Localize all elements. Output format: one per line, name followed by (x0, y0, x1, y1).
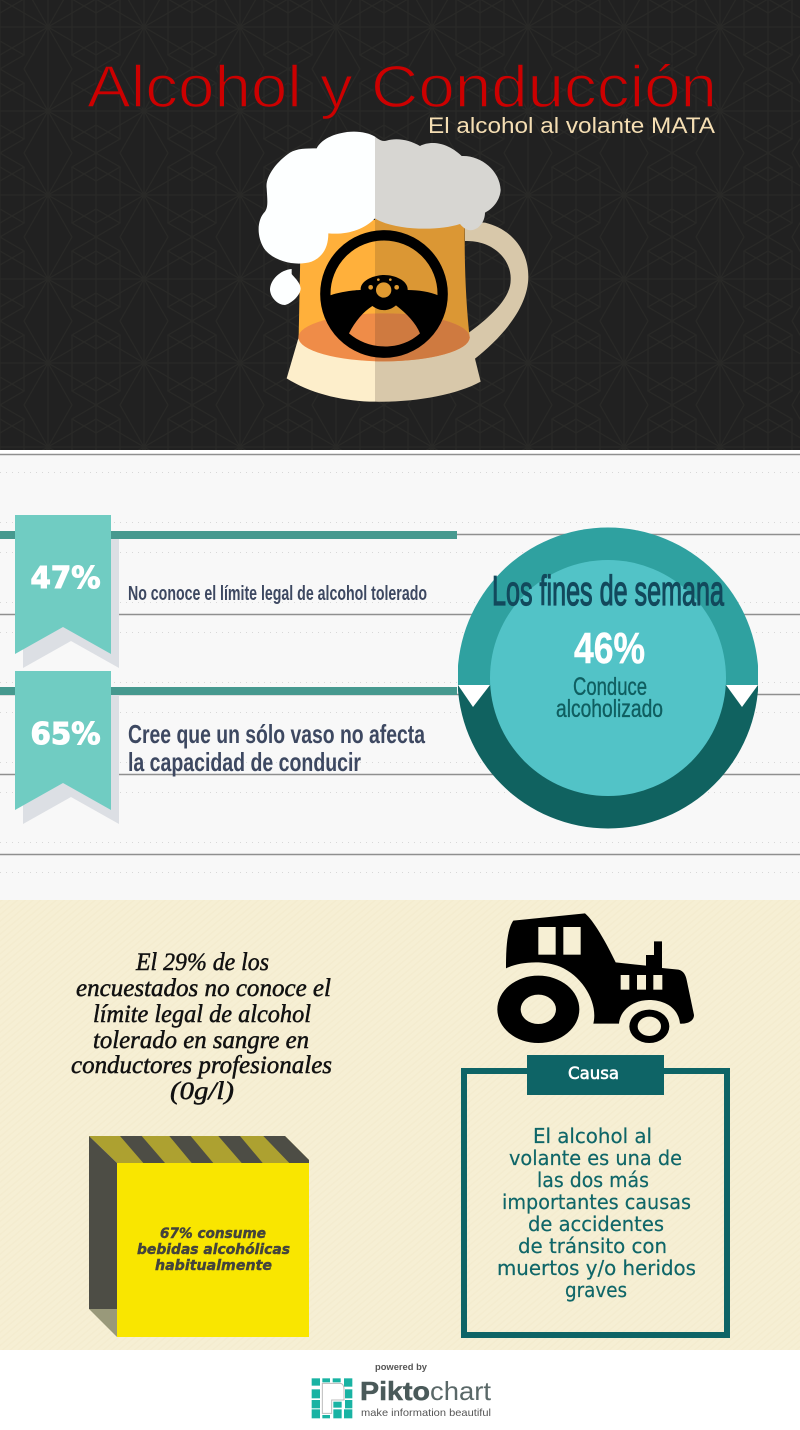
panel body text: de tránsito con (518, 1234, 667, 1258)
foam right (375, 137, 501, 230)
crate text (137, 1226, 290, 1274)
statement 65%: Cree que un sólo vaso no afecta (128, 719, 425, 749)
crate top gold (89, 1136, 309, 1163)
teal bar two (0, 687, 457, 695)
ribbon 47% (15, 515, 119, 668)
ribbon body (15, 671, 111, 810)
statement 65% (128, 719, 425, 777)
script text block (71, 949, 332, 1105)
ruled notebook lines (0, 454, 800, 872)
crate text: 67% consume (160, 1226, 266, 1242)
crate front (117, 1163, 309, 1337)
beer liquid ellipse (298, 313, 470, 361)
ribbon body (15, 515, 111, 654)
ribbon shadow (23, 695, 119, 824)
cream section background (0, 900, 800, 1350)
subtitle: El alcohol al volante MATA (428, 113, 715, 138)
crate underside (89, 1309, 117, 1337)
steering wheel rim (325, 235, 443, 353)
ribbon value: 47% (30, 561, 100, 596)
title: Alcohol y Conducción (87, 54, 717, 120)
script text block: tolerado en sangre en (93, 1027, 309, 1054)
cause panel (464, 1055, 727, 1335)
script text block: (0g/l) (170, 1078, 234, 1105)
footer wordmark: Pikto (360, 1376, 430, 1406)
front wheel (629, 1010, 669, 1043)
script text block: límite legal de alcohol (93, 1001, 311, 1028)
panel body text: volante es una de (509, 1146, 682, 1170)
ribbon shadow (23, 539, 119, 668)
footer tagline: make information beautiful (361, 1407, 491, 1419)
beer liquid ellipse shade (375, 314, 470, 362)
script text block: conductores profesionales (71, 1052, 332, 1079)
steering wheel spokes (329, 275, 439, 352)
light statistics section background (0, 454, 800, 900)
steering wheel hub (376, 282, 391, 298)
statement 65%: la capacidad de conducir (128, 747, 361, 777)
icon: tractor (497, 913, 694, 1043)
panel body text: importantes causas (502, 1190, 691, 1214)
ring upper half (458, 528, 758, 685)
footer wordmark (360, 1376, 492, 1406)
crate text: habitualmente (155, 1258, 272, 1274)
panel body text: las dos más (537, 1168, 649, 1192)
footer background (0, 1350, 800, 1430)
mug handle (463, 222, 528, 360)
teal bar one (0, 531, 457, 539)
circle value: 46% (574, 624, 645, 673)
foam drop (270, 269, 301, 305)
mug base left (287, 338, 375, 402)
crate top stripes (120, 1136, 309, 1163)
ribbon 65% (15, 671, 119, 824)
circle caption: alcoholizado (556, 695, 663, 723)
panel body text: muertos y/o heridos (497, 1256, 696, 1280)
left fold triangle (458, 685, 490, 707)
panel body text: de accidentes (528, 1212, 664, 1236)
foam left (259, 132, 375, 264)
panel header label: Causa (568, 1064, 619, 1084)
icon: Piktochart logo (312, 1378, 352, 1418)
white separator strip (0, 450, 800, 454)
inner disc (490, 560, 726, 796)
footer wordmark: chart (430, 1376, 492, 1406)
mug glass left (298, 220, 375, 353)
yellow crate (89, 1136, 309, 1337)
panel header tab (527, 1055, 664, 1095)
circle: fines de semana (458, 528, 758, 828)
footer powered by: powered by (375, 1362, 428, 1373)
script text block: El 29% de los (135, 949, 269, 976)
tractor windows (538, 927, 662, 990)
right fold triangle (726, 685, 758, 707)
rear wheel (497, 976, 579, 1043)
script text block: encuestados no conoce el (76, 975, 331, 1002)
mug base right (375, 338, 481, 402)
tractor body (506, 913, 694, 1024)
crate text: bebidas alcohólicas (137, 1242, 290, 1258)
steering wheel buttons (368, 278, 399, 290)
panel frame (464, 1071, 727, 1335)
circle caption: Conduce (573, 673, 647, 701)
circle caption (556, 673, 663, 723)
panel body text (497, 1124, 696, 1302)
mug glass right (375, 217, 470, 340)
dark header background (0, 0, 800, 450)
panel body text: graves (565, 1278, 627, 1302)
ribbon value: 65% (30, 717, 100, 752)
statement 47%: No conoce el límite legal de alcohol tolerado (128, 583, 427, 605)
crate side (89, 1136, 117, 1309)
icon: beer mug with steering wheel (259, 132, 528, 402)
panel body text: El alcohol al (533, 1124, 652, 1148)
ring lower half (458, 685, 758, 828)
